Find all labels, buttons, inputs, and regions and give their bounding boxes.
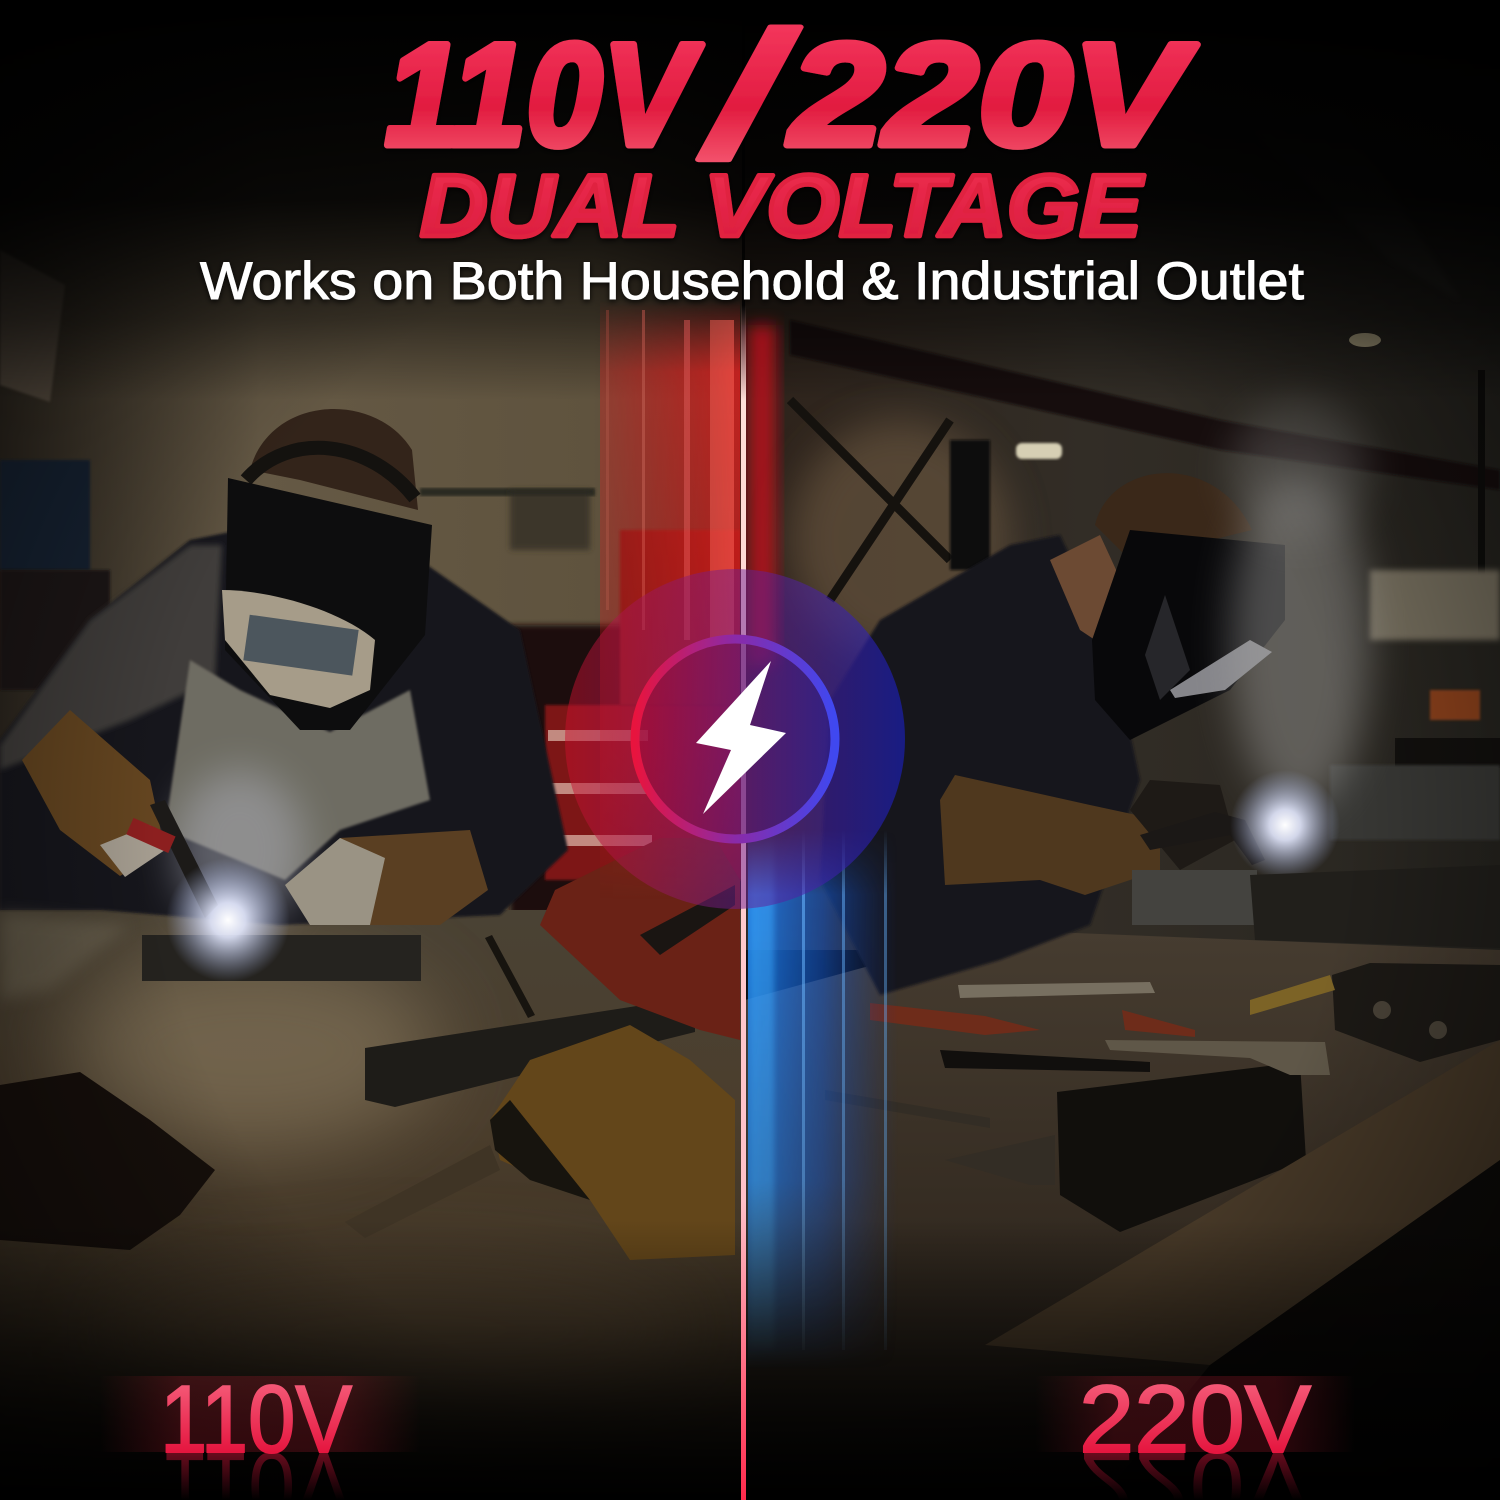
right welder bbox=[820, 400, 1370, 995]
title: 110V bbox=[385, 13, 703, 176]
helmet bbox=[225, 478, 432, 730]
glove bbox=[940, 775, 1160, 895]
welding apron piece bbox=[540, 838, 740, 1040]
blue light beams bbox=[748, 830, 898, 1370]
title: 220V bbox=[787, 13, 1197, 176]
bottom dark overlay bbox=[0, 1220, 1500, 1500]
red glow beside line bbox=[748, 325, 776, 665]
label: 220V: 220V bbox=[1079, 1366, 1311, 1473]
tagline: Works on Both Household & Industrial Outlet bbox=[200, 252, 1304, 311]
spare leather glove bbox=[490, 1025, 735, 1260]
center divider line bbox=[741, 305, 746, 1500]
black glove bbox=[0, 1072, 215, 1250]
apron bbox=[165, 660, 430, 880]
right work surface items bbox=[825, 865, 1500, 1500]
smoke bbox=[1230, 470, 1370, 810]
label: 110V bbox=[100, 1366, 420, 1500]
label: 110V: 110V bbox=[160, 1366, 352, 1473]
title bbox=[385, 0, 1197, 194]
hair bbox=[250, 409, 418, 510]
top dark overlay bbox=[0, 0, 1500, 400]
red light beams bbox=[600, 300, 740, 900]
background: left workshop bbox=[0, 0, 745, 1500]
right glove bbox=[340, 830, 488, 925]
icon: lightning bolt bbox=[696, 661, 786, 814]
torch bbox=[1140, 812, 1265, 865]
red tool cabinet bbox=[545, 705, 745, 880]
torch bbox=[150, 800, 218, 918]
label: 220V bbox=[1035, 1366, 1355, 1500]
helmet bbox=[1092, 530, 1285, 740]
background: right workshop bbox=[745, 0, 1500, 1500]
voltage switch icon bbox=[565, 569, 905, 909]
left work surface items bbox=[0, 838, 740, 1260]
left welder bbox=[0, 409, 568, 930]
subtitle: dual voltage: DUAL VOLTAGE bbox=[420, 156, 1144, 255]
head bbox=[1095, 473, 1252, 560]
torso and arms bbox=[0, 530, 568, 925]
title: / bbox=[698, 0, 801, 194]
left glove bbox=[22, 710, 165, 876]
